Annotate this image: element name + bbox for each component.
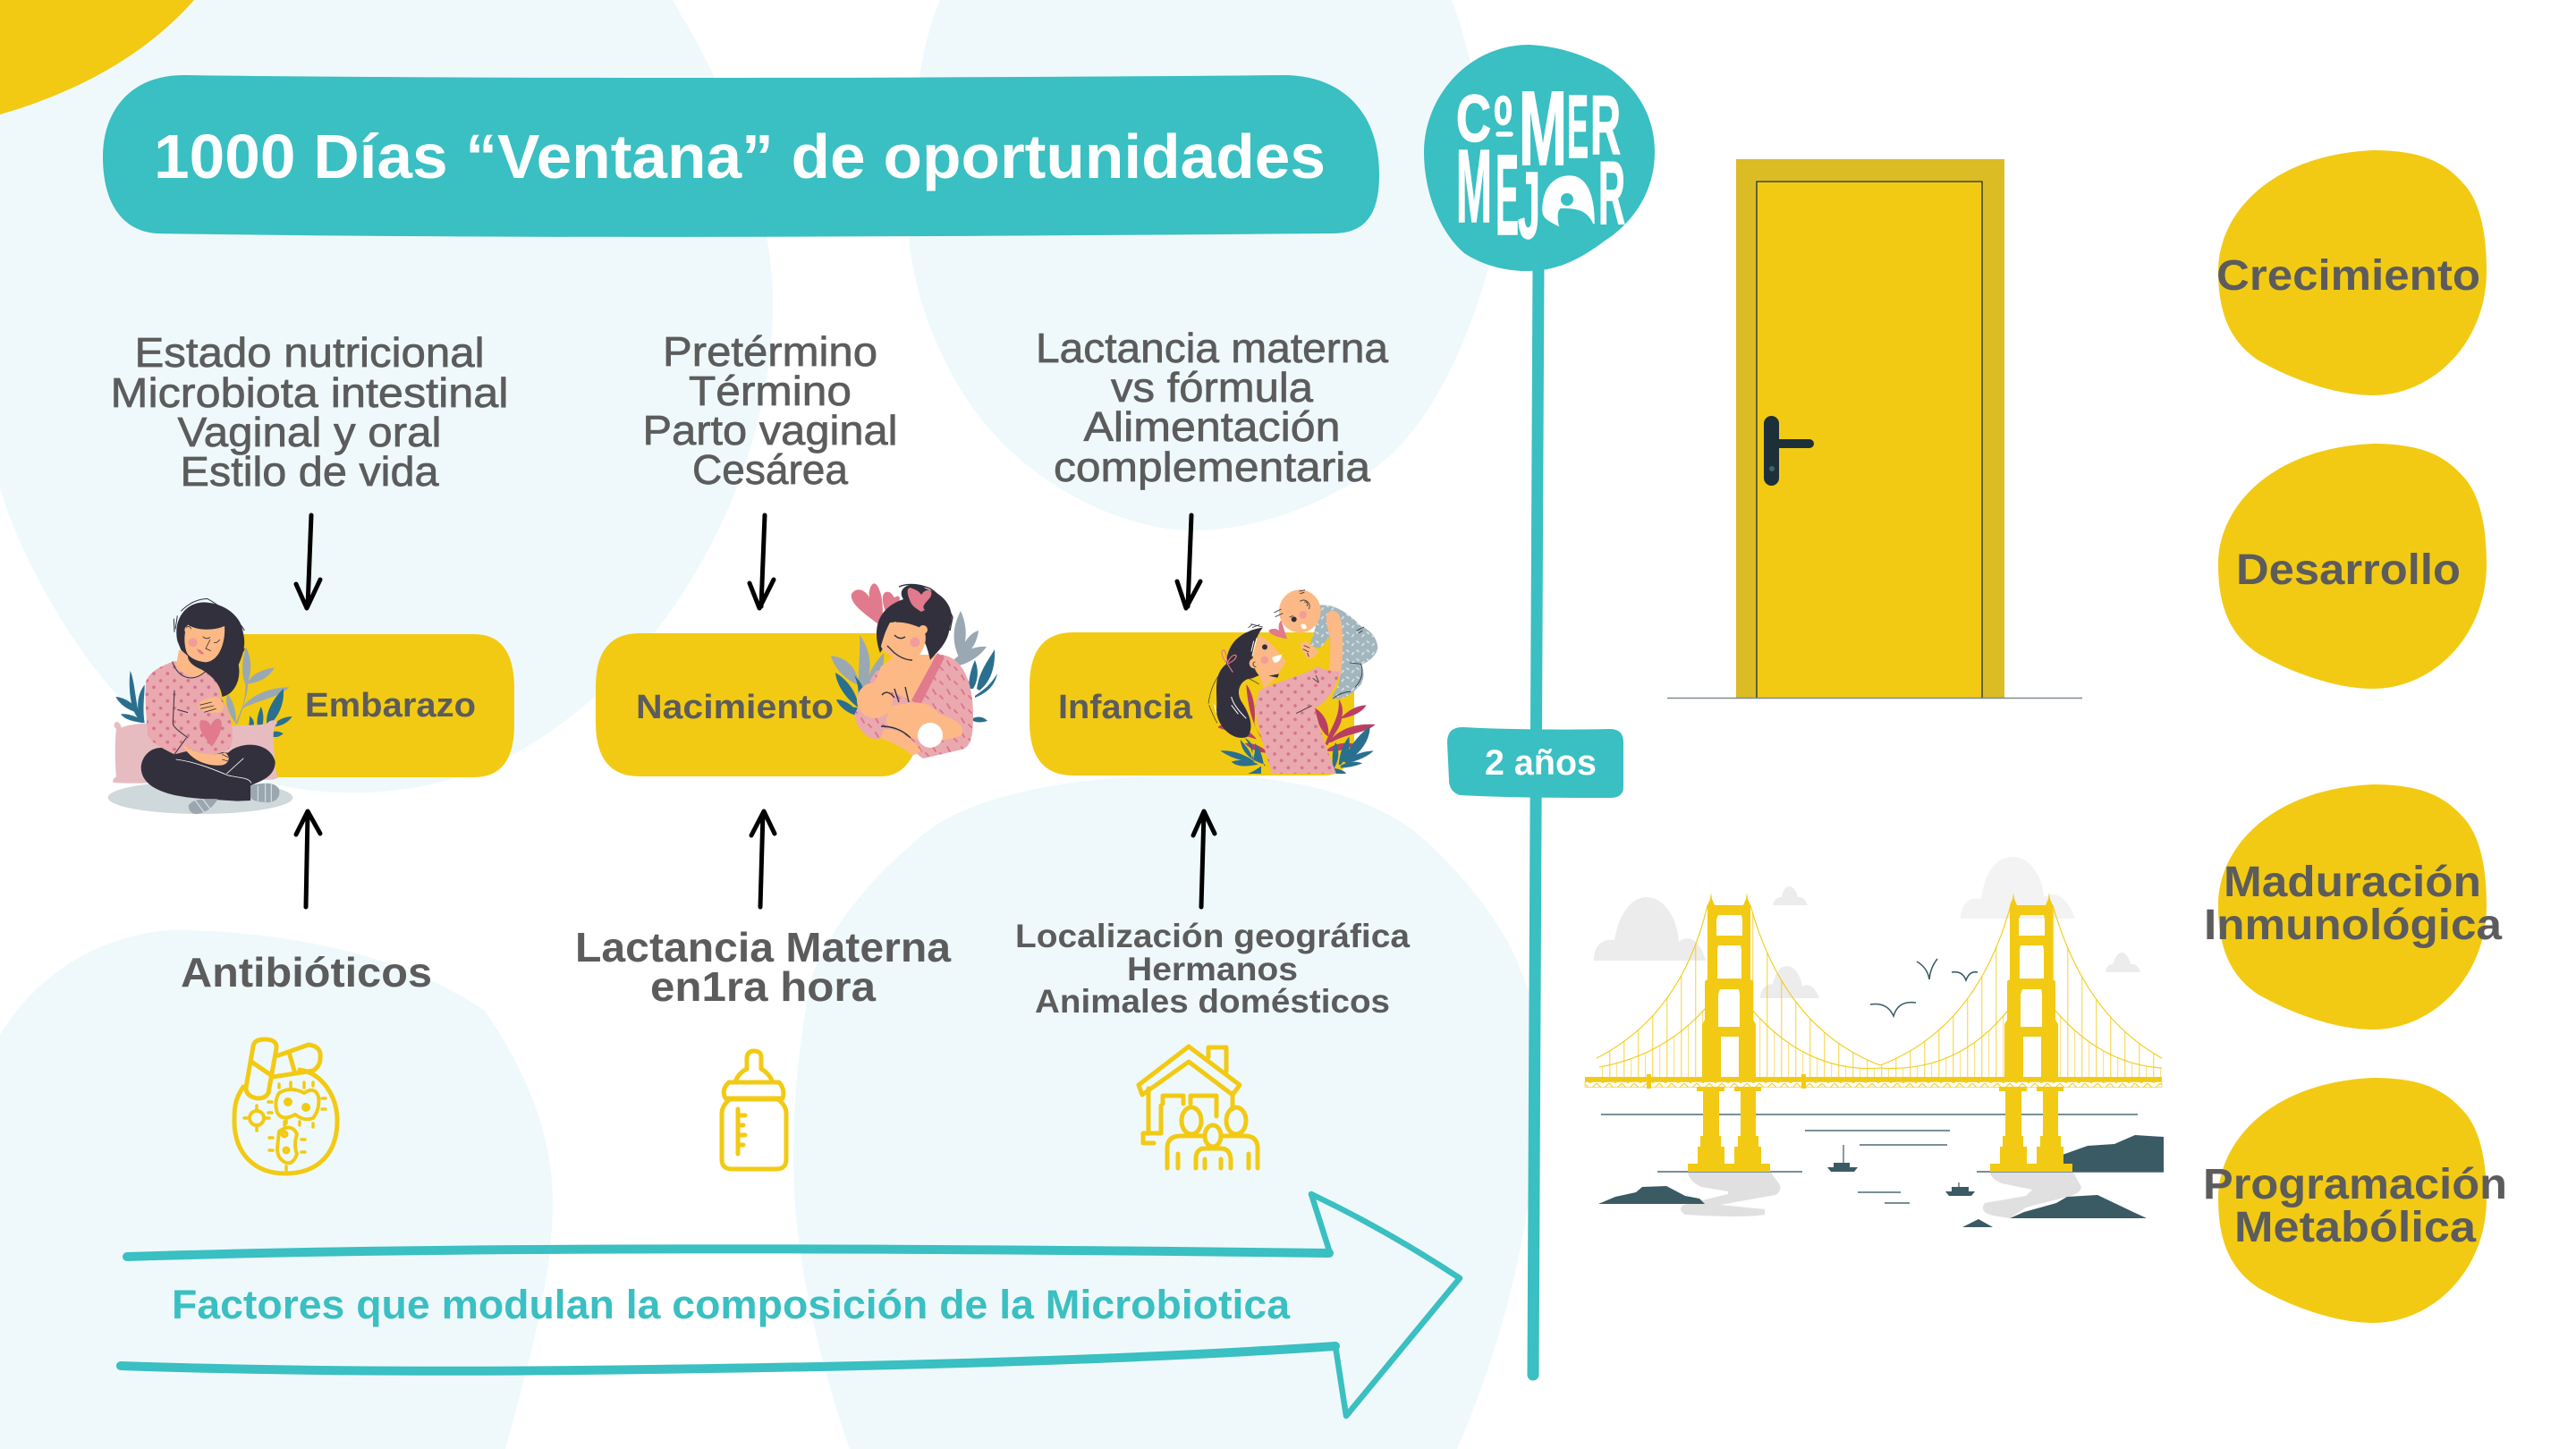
- logo: Comer Mejor: M: [1456, 128, 1492, 244]
- column 3 top factors: complementaria: [1054, 444, 1370, 490]
- text: Lactancia Materna en 1ra hora: en1ra hora: [650, 963, 876, 1010]
- icon: antibiotics and bacteria: [234, 1039, 337, 1174]
- column 1 top factors: Vaginal y oral: [177, 409, 442, 455]
- main cables: [1597, 905, 2162, 1068]
- text: geographic factors: Localización geográfica: [1015, 918, 1410, 954]
- logo: Comer Mejor: o: [1494, 78, 1513, 136]
- column 3 top factors: Lactancia materna: [1036, 325, 1388, 371]
- title banner: [103, 75, 1379, 237]
- pill: Infancia: Infancia: [1058, 689, 1193, 726]
- illustration: mother lifting baby: [1208, 589, 1377, 774]
- logo: Comer Mejor: [1424, 45, 1655, 271]
- illustration: door: [1667, 159, 2082, 698]
- pill: Nacimiento: Nacimiento: [636, 689, 834, 726]
- text: Lactancia Materna en 1ra hora: [575, 924, 951, 1010]
- column 1 top factors: Estilo de vida: [181, 448, 439, 495]
- yellow corner shape: [0, 0, 194, 114]
- logo: Comer Mejor: R: [1598, 143, 1625, 243]
- blob: Programación Metabólica: Programación: [2203, 1161, 2507, 1208]
- blob: Programación Metabólica: [2203, 1078, 2507, 1323]
- illustration: pregnant woman: [108, 598, 292, 814]
- title text: 1000 Días “Ventana” de oportunidades: [154, 122, 1326, 191]
- decorative background blobs: [0, 0, 1539, 1449]
- logo: Comer Mejor: C: [1456, 81, 1491, 156]
- tower left: [1688, 893, 1770, 1172]
- pill: Embarazo: [206, 634, 514, 777]
- blob: Desarrollo: Desarrollo: [2236, 547, 2461, 594]
- big arrow outline: [121, 1194, 1460, 1416]
- text: geographic factors: Animales domésticos: [1035, 983, 1390, 1020]
- blob: Maduración Inmunológica: [2204, 784, 2502, 1030]
- arrow label: Factores que modulan la composición de la Microbiotica: [172, 1282, 1291, 1327]
- logo: Comer Mejor: J: [1518, 153, 1540, 258]
- logo: Comer Mejor: E: [1567, 77, 1589, 177]
- badge: 2 años: [1447, 727, 1623, 798]
- pill: Embarazo: Embarazo: [305, 687, 476, 724]
- blob: Maduración Inmunológica: Maduración: [2224, 859, 2481, 906]
- blob: Crecimiento: Crecimiento: [2216, 252, 2480, 300]
- water reflections: [1681, 1173, 2081, 1218]
- suspender cables: [1597, 905, 2162, 1077]
- arrows down: [296, 515, 1200, 608]
- blob: Desarrollo: [2218, 444, 2487, 689]
- column 3 top factors: [1036, 325, 1388, 490]
- column 3 top factors: Alimentación: [1084, 403, 1340, 450]
- logo: Comer Mejor: R: [1590, 78, 1621, 172]
- column 1 top factors: [111, 329, 508, 495]
- text: Antibióticos: Antibióticos: [181, 949, 432, 996]
- text: Lactancia Materna en 1ra hora: Lactancia Materna: [575, 924, 951, 970]
- column 3 top factors: vs fórmula: [1111, 364, 1313, 411]
- arrows up: [296, 811, 1215, 907]
- icon: baby bottle: [722, 1051, 786, 1169]
- column 2 top factors: [642, 328, 898, 493]
- text: geographic factors: Hermanos: [1127, 951, 1298, 987]
- column 2 top factors: Cesárea: [692, 446, 848, 493]
- birds: [1870, 959, 1978, 1016]
- logo: Comer Mejor: E: [1496, 131, 1519, 259]
- badge: 2 años: 2 años: [1485, 743, 1597, 783]
- blob: Crecimiento: [2216, 150, 2487, 395]
- text: geographic factors: [1015, 918, 1410, 1020]
- blob: Programación Metabólica: Metabólica: [2234, 1204, 2476, 1251]
- pill: Infancia: [1030, 632, 1354, 775]
- logo: Comer Mejor: M: [1519, 70, 1567, 188]
- blob: Maduración Inmunológica: Inmunológica: [2204, 902, 2502, 949]
- clouds: [1594, 857, 2140, 998]
- column 2 top factors: Pretérmino: [663, 328, 877, 375]
- column 2 top factors: Término: [689, 368, 852, 414]
- timeline vertical line: [1533, 264, 1538, 1375]
- column 1 top factors: Estado nutricional: [134, 329, 485, 376]
- icon: house with family: [1139, 1046, 1258, 1168]
- door handle: [1764, 416, 1814, 486]
- illustration: breastfeeding mother: [831, 583, 997, 758]
- pill: Nacimiento: [596, 633, 921, 776]
- islands: [1598, 1135, 2164, 1227]
- illustration: bridge: [1585, 857, 2164, 1227]
- deck: [1585, 1074, 2162, 1089]
- tower right: [1990, 893, 2072, 1172]
- water lines: [1601, 1114, 2164, 1203]
- column 2 top factors: Parto vaginal: [642, 407, 898, 453]
- column 1 top factors: Microbiota intestinal: [111, 369, 508, 416]
